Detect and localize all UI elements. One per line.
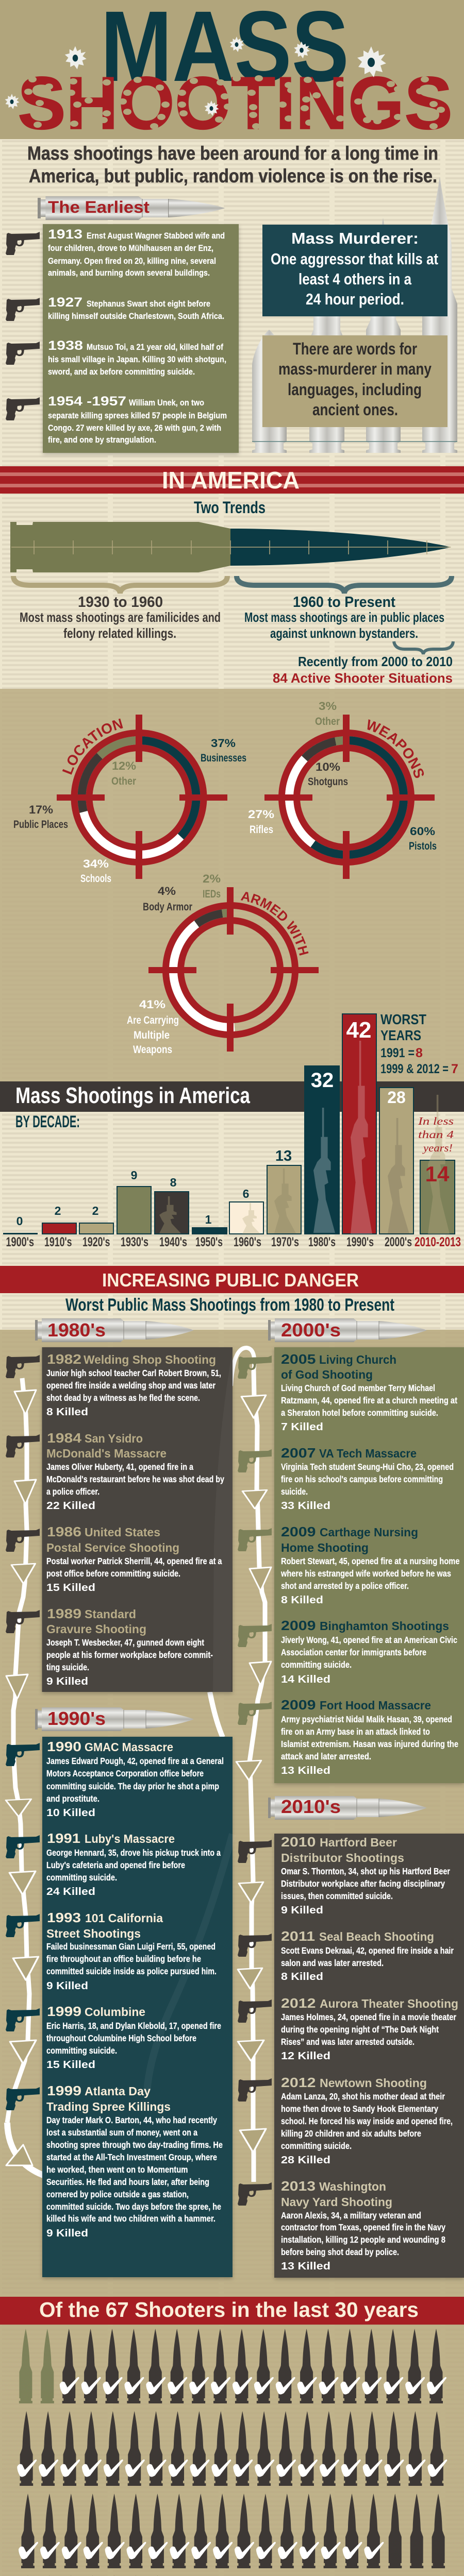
bullet heading: The Earliest: The Earliest [48,198,150,216]
bar chart: mass shootings by decade: 8 [170,1176,177,1189]
chart: weapons ring: Shotguns [308,776,348,788]
callout: mass murderer definition [262,225,448,316]
event: 1990: James Edward Pough, 42, opened fire at a General [46,1756,224,1766]
chart: weapons ring: WEAPONS [367,719,424,778]
event: 1999 Atlanta: started at the All-Tech Investment Group, where [46,2152,217,2162]
event: 2012 Newtown [238,2075,453,2166]
event: 1938 [6,338,226,377]
chart: weapons ring: 3% [319,700,337,713]
event: 1999 Atlanta: Trading Spree Killings [46,2100,171,2113]
event: 1984 [6,1430,224,1512]
bar chart: mass shootings by decade: 1950's [195,1235,223,1249]
event: 1993 [6,1910,217,1992]
trend: 1930 to 1960 [13,576,227,641]
event: 1913: animals, and burning down several buildings. [48,268,210,278]
event: 1999 Atlanta: lost a substantial sum of money, went on a [46,2127,197,2138]
chart: armed with ring: IEDs [203,888,221,900]
event: 1954-1957: 1954 -1957 [48,394,126,409]
event: 1991: George Hennard, 35, drove his pickup truck into a [46,1848,221,1858]
bar chart: mass shootings by decade: 2000's [385,1235,412,1249]
event: 1986: Postal Service Shooting [46,1541,179,1554]
event: 1989: people at his former workplace before commit- [46,1650,213,1660]
panel: 2010s shootings [238,1834,464,2278]
event: 2013: Washington [319,2180,386,2193]
heading band: Mass Shootings in America [0,1081,464,1112]
event: 1989: Joseph T. Wesbecker, 47, gunned down eight [46,1637,204,1648]
title: Mass Shootings header [0,0,464,145]
bar chart: mass shootings by decade: 14 [425,1162,450,1186]
bullet row 4 [21,2575,164,2576]
event: 2012 Aurora: Rises” and was later arrested outside. [281,2037,415,2047]
event: 1984: 1984 [47,1430,82,1446]
event: 1986: post office before committing suicide. [46,1568,180,1579]
callout: mass murderer definition: least 4 others in a [299,270,412,288]
callout: words for mass murderer [262,335,448,427]
event: 2009 Fort Hood: fire on an Army base in an attack linked to [281,1726,430,1737]
bullet heading: 2010's: 2010's [281,1796,341,1817]
event: 1999 Atlanta: 1999 [47,2083,81,2098]
event: 2005: 2005 [281,1351,316,1367]
event: 2009 Fort Hood [238,1697,458,1776]
bar chart: mass shootings by decade [4,1014,461,1249]
annotation: in less than 4 years: years! [422,1142,453,1154]
event: 1982: shot dead by a witness as he fled the scene. [46,1393,200,1403]
event: 2012 Aurora: during the opening night of “The Dark Night [281,2024,439,2035]
event: 2012 Aurora: Aurora Theater Shooting [320,1997,458,2010]
event: 1991: Luby's cafeteria and opened fire before [46,1860,185,1870]
event: 1938: sword, and ax before committing suicide. [48,367,195,377]
bar chart: mass shootings by decade: 2 [92,1204,98,1217]
event: 1954-1957: separate killing sprees killed 57 people in Belgium [48,411,227,420]
event: 1991: 1991 [47,1831,80,1846]
chart: armed with ring: Body Armor [143,901,192,913]
event: 1989: 9 Killed [46,1676,88,1687]
event: 1989: 1989 [47,1606,81,1621]
arrow: left timeline [6,1378,43,2175]
event: 1913: 1913 [48,227,82,242]
chart: armed with ring: 41% [139,998,165,1011]
event: 2009 Carthage: Home Shooting [281,1541,369,1554]
chart: armed with ring: Multiple [134,1029,170,1041]
event: 1913 [6,227,225,278]
callout: worst years: WORST [380,1011,426,1027]
event: 1982 [6,1351,221,1418]
event: 2013: 2013 [281,2178,316,2194]
bullet heading: 2000's: 2000's [281,1319,341,1341]
bar chart: mass shootings by decade: 1930's [121,1235,148,1249]
annotation: in less than 4 years [418,1115,454,1154]
callout: recently 2000 to 2010: 84 Active Shooter Situations [273,670,453,686]
event: 2013: Navy Yard Shooting [281,2195,392,2209]
event: 1989: ting suicide. [46,1662,89,1672]
event: 1991: committing suicide. [46,1872,117,1883]
event: 1991 [6,1831,221,1897]
pictogram: 67 shooters as bullets [17,2329,447,2576]
bullet heading: 1990's [35,1707,194,1731]
event: 1999 Atlanta [6,2083,223,2239]
chart: location ring: Schools [80,873,111,885]
event: 1991: 24 Killed [46,1886,95,1897]
chart: weapons ring: 60% [410,825,435,838]
event: 2009 Binghamton: committing suicide. [281,1659,352,1670]
bar chart: mass shootings by decade: 32 [311,1069,334,1092]
event: 1984: James Oliver Huberty, 41, opened fire in a [46,1462,193,1472]
event: 2011: Seal Beach Shooting [319,1930,434,1943]
bar chart: mass shootings by decade: 1970's [271,1235,299,1249]
event: 1984: McDonald's restaurant before he was shot dead by [46,1474,224,1484]
chart: location ring: Businesses [201,752,246,764]
banner: Increasing Public Danger: INCREASING PUBLIC DANGER [102,1269,359,1291]
chart: armed with ring: Weapons [133,1044,172,1056]
callout: words for mass murderer: mass-murderer in many [278,360,432,378]
chart: weapons ring: 10% [316,760,340,773]
event: 1993: fire throughout an office building before he [46,1954,201,1964]
event: 1927: Stephanus Swart shot eight before [87,299,210,309]
event: 2009 Binghamton: Binghamton Shootings [320,1619,449,1633]
event: 1991: Luby's Massacre [85,1832,175,1845]
callout: mass murderer definition: 24 hour period. [306,290,404,308]
event: 2009 Binghamton: 2009 [281,1618,316,1633]
event: 2011 [238,1928,454,1982]
event: 1990: 10 Killed [46,1807,95,1819]
chart: location ring: 37% [211,737,236,750]
event: 1984: San Ysidro [85,1432,143,1445]
event: 2007: 33 Killed [281,1500,330,1512]
bullet row 3 [19,2494,445,2568]
event: 1938: his small village in Japan. Killing 30 with shotgun, [48,354,226,364]
event: 1999 Atlanta: committed suicide. Two days before the spree, he [46,2201,221,2212]
callout: words for mass murderer: languages, including [288,380,422,399]
bar chart: mass shootings by decade: 1900's [6,1235,34,1249]
bullet row 1 [19,2329,446,2403]
bullet heading: 1980's: 1980's [47,1319,106,1341]
event: 1938: 1938 [48,338,83,353]
event: 2009 Carthage: Carthage Nursing [320,1526,418,1539]
arrow: right timeline [210,1348,271,2182]
event: 1990: Motors Acceptance Corporation office before [46,1768,204,1778]
event: 2012 Newtown: Newtown Shooting [320,2076,427,2090]
event: 1999 Atlanta: shooting spree through two day-trading firms. He [46,2140,223,2150]
event: 2007 [238,1445,454,1512]
event: 2012 Aurora: 12 Killed [281,2050,330,2062]
event: 1954-1957: fire, and one by strangulation. [48,435,156,445]
event: 2012 Newtown: 2012 [281,2075,316,2090]
event: 1982: 1982 [47,1351,81,1367]
annotation: in less than 4 years: than 4 [418,1128,454,1141]
event: 2009 Fort Hood: 2009 [281,1697,316,1713]
event: 1989: Gravure Shooting [46,1622,146,1636]
chart: location ring: 34% [83,857,109,870]
event: 1993: 101 California [85,1911,163,1925]
event: 1990: committing suicide. The day prior he shot a pimp [46,1781,219,1791]
event: 1999 Atlanta: he worked, then went on to Momentum [46,2164,188,2175]
event: 1999 Columbine: 15 Killed [46,2059,95,2071]
heading: Two Trends: Two Trends [194,498,266,517]
event: 2005 [238,1351,457,1433]
event: 2009 Fort Hood: Fort Hood Massacre [320,1699,431,1712]
callout: words for mass murderer: There are words for [293,340,417,358]
event: 1913: Ernst August Wagner Stabbed wife and [87,231,225,241]
trend: 1960 to present: 1960 to Present [293,594,395,611]
chart: armed with ring: 2% [203,872,221,885]
event: 1938: Mutsuo Toi, a 21 year old, killed half of [87,342,223,352]
event: 1999 Atlanta: killed his wife and two children with a hammer. [46,2213,216,2224]
event: 1999 Columbine: Eric Harris, 18, and Dylan Klebold, 17, opened fire [46,2021,221,2031]
timeline bullet: two trends [10,522,451,572]
bar chart: mass shootings by decade: 9 [131,1168,137,1182]
event: 2011: 8 Killed [281,1971,323,1982]
event: 1999 Columbine: 1999 [47,2004,81,2019]
banner: Of the 67 shooters: Of the 67 Shooters in the last 30 years [39,2298,419,2321]
event: 1984: 22 Killed [46,1500,95,1512]
event: 2009 Binghamton [238,1618,457,1685]
event: 1982: Welding Shop Shooting [84,1353,216,1366]
event: 1990: 1990 [47,1739,81,1754]
event: 1989 [6,1606,213,1687]
annotation: in less than 4 years: In less [418,1115,454,1127]
event: 1986: 15 Killed [46,1582,95,1594]
event: 2012 Newtown: 28 Killed [281,2155,330,2166]
bar chart: mass shootings by decade: 1960's [234,1235,261,1249]
event: 2009 Fort Hood: 13 Killed [281,1765,330,1776]
event: 2013: Aaron Alexis, 34, a military veteran and [281,2210,421,2221]
event: 1927: 1927 [48,295,82,310]
bar chart: mass shootings by decade: 42 [346,1018,371,1043]
bar chart: mass shootings by decade: 2 [55,1204,61,1217]
event: 1986: 1986 [47,1524,81,1539]
bar chart: mass shootings by decade: 0 [16,1214,23,1228]
bar chart: mass shootings by decade: 1990's [346,1235,374,1249]
event: 1990: GMAC Massacre [85,1740,173,1754]
event: 1999 Atlanta: Atlanta Day [85,2084,151,2098]
event: 1954-1957: Congo. 27 were killed by axe, 26 with gun, 2 with [48,423,221,433]
bullet heading: 1990's: 1990's [47,1708,106,1729]
event: 2012 Aurora: 2012 [281,1995,316,2011]
trend: 1960 to present [237,576,452,641]
event: 1986 [6,1524,222,1594]
event: 2005: 7 Killed [281,1421,323,1433]
event: 2011: 2011 [281,1928,315,1944]
event: 1993: 1993 [47,1910,81,1925]
event: 2009 Binghamton: Association center for immigrants before [281,1647,426,1657]
callout: mass murderer definition: Mass Murderer: [291,229,419,247]
event: 2005: Living Church [319,1353,396,1366]
event: 1927 [6,295,224,321]
trend: 1930 to 1960: 1930 to 1960 [78,594,163,611]
trend: 1930 to 1960: felony related killings. [63,625,176,641]
event: 1999 Atlanta: Securities. He fled and hours later, after being [46,2177,209,2187]
chart: weapons ring: Rifles [250,824,273,836]
bar chart: mass shootings by decade: 1940's [159,1235,187,1249]
panel: earliest shootings [6,224,239,453]
heading band: Mass Shootings in America: Mass Shootings in America [15,1083,250,1108]
bar chart: mass shootings by decade: 1 [205,1213,212,1226]
callout: worst years: 8 [416,1046,423,1060]
banner: Increasing Public Danger [0,1266,464,1293]
event: 2010 [238,1834,450,1916]
callout: recently 2000 to 2010 [273,641,453,686]
event: 2013: before being shot dead by police. [281,2247,399,2257]
bar chart: mass shootings by decade: 1920's [82,1235,110,1249]
event: 2009 Carthage: 8 Killed [281,1595,323,1606]
event: 1989: Standard [85,1607,136,1621]
chart: armed with ring: ARMED WITH [240,892,308,956]
event: 1927: killing himself outside Charlestown, South Africa. [48,311,224,321]
event: 1990 [6,1739,224,1819]
event: 1993: Failed businessman Gian Luigi Ferri, 55, opened [46,1941,216,1952]
event: 2013: 13 Killed [281,2261,330,2272]
event: 1993: committed suicide inside as police pursued him. [46,1966,217,1976]
callout: words for mass murderer: ancient ones. [312,400,398,419]
bullet heading: 2000's [268,1318,427,1342]
label: by decade: BY DECADE: [15,1112,80,1131]
event: 2007: suicide. [281,1486,308,1497]
event: 2013 [238,2178,445,2272]
event: 1999 Columbine: committing suicide. [46,2045,117,2056]
callout: worst years: 1991 = [380,1046,415,1060]
event: 1999 Atlanta: 9 Killed [46,2228,88,2239]
chart: location ring: 17% [29,803,53,816]
event: 2012 Newtown: committing suicide. [281,2141,352,2151]
event: 2010: issues, then committed suicide. [281,1891,393,1901]
event: 1954-1957 [6,394,227,445]
bullet row 2 [17,2411,447,2486]
chart: armed with ring [127,872,319,1056]
chart: location ring: Other [111,775,136,787]
bullet heading: 2010's [268,1796,427,1820]
bar chart: mass shootings by decade: 1910's [44,1235,72,1249]
event: 1993: Street Shootings [46,1927,141,1940]
chart: weapons ring: Pistols [409,840,437,852]
chart: location ring: Public Places [13,819,68,831]
event: 1986: Postal worker Patrick Sherrill, 44, opened fire at a [46,1556,222,1566]
event: 2012 Newtown: killing 20 children and six adults before [281,2128,421,2139]
chart: location ring: 12% [112,759,136,772]
event: 1982: 8 Killed [46,1406,88,1418]
callout: worst years [380,1011,458,1076]
chart: armed with ring: Are Carrying [127,1014,179,1026]
bar chart: mass shootings by decade: 6 [243,1187,249,1200]
callout: worst years: 7 [451,1062,458,1076]
event: 2009 Binghamton: 14 Killed [281,1674,330,1685]
bar chart: mass shootings by decade: 13 [275,1148,292,1164]
event: 2009 Carthage: 2009 [281,1524,316,1539]
event: 2010: Hartford Beer [320,1836,397,1849]
chart: weapons ring [248,700,437,879]
callout: worst years: 1999 & 2012 = [380,1062,449,1076]
event: 1999 Atlanta: cornered by police outside a gas station, [46,2189,189,2199]
banner: In America [0,466,464,494]
chart: location ring [13,715,246,885]
bar chart: mass shootings by decade: 1980's [308,1235,336,1249]
event: 1990: and prostitute. [46,1793,100,1804]
event: 2007: VA Tech Massacre [319,1447,417,1460]
event: 1954-1957: William Unek, on two [129,398,204,408]
event: 2010: 9 Killed [281,1905,323,1916]
event: 2007: 2007 [281,1445,316,1461]
intro text [27,143,438,187]
event: 1982: Junior high school teacher Carl Robert Brown, 51, [46,1368,221,1378]
chart: weapons ring: 27% [248,808,274,821]
event: 1993: 9 Killed [46,1980,88,1992]
event: 1984: McDonald's Massacre [46,1447,167,1460]
event: 1984: a police officer. [46,1486,100,1497]
panel: 1990s shootings [6,1737,233,2277]
bullet heading: The Earliest [38,196,225,220]
event: 1982: opened fire inside a welding shop and was later [46,1380,216,1391]
trend: 1960 to present: against unknown bystanders. [270,625,418,641]
trend: 1930 to 1960: Most mass shootings are familicides and [20,609,221,625]
panel: 2000s shootings [238,1347,464,1783]
chart: weapons ring: Other [315,716,340,727]
event: 1913: Germany. Open fired on 20, killing nine, several [48,256,216,266]
event: 1999 Columbine [6,2004,221,2071]
event: 1999 Columbine: throughout Columbine High School before [46,2033,196,2043]
event: 2009 Carthage: shot and arrested by a police officer. [281,1581,409,1591]
title: Mass Shootings header: SHOOTINGS [18,61,453,145]
event: 2010: 2010 [281,1834,316,1850]
event: 1913: four children, drove to Mühlhausen an der Enz, [48,243,213,253]
event: 2005: a Sheraton hotel before committing suicide. [281,1408,438,1418]
event: 1986: United States [85,1526,160,1539]
bullet heading: 1980's [35,1318,194,1342]
callout: worst years: YEARS [380,1027,421,1043]
bar chart: mass shootings by decade: 28 [387,1088,406,1107]
panel: 1980s shootings [6,1347,233,1692]
event: 2012 Aurora [238,1995,458,2062]
event: 2009 Fort Hood: attack and later arrested. [281,1751,371,1761]
event: 2005: of God Shooting [281,1368,373,1381]
event: 2010: Distributor Shootings [281,1851,404,1865]
bullets behind definition boxes [252,177,457,453]
event: 2011: salon and was later arrested. [281,1958,384,1968]
event: 2009 Carthage [238,1524,460,1606]
banner: In America: IN AMERICA [162,467,300,494]
event: 1999 Columbine: Columbine [85,2005,145,2019]
event: 1999 Atlanta: Day trader Mark O. Barton, 44, who had recently [46,2115,217,2125]
chart: armed with ring: 4% [158,885,176,897]
chart: location ring: LOCATION [62,718,123,775]
